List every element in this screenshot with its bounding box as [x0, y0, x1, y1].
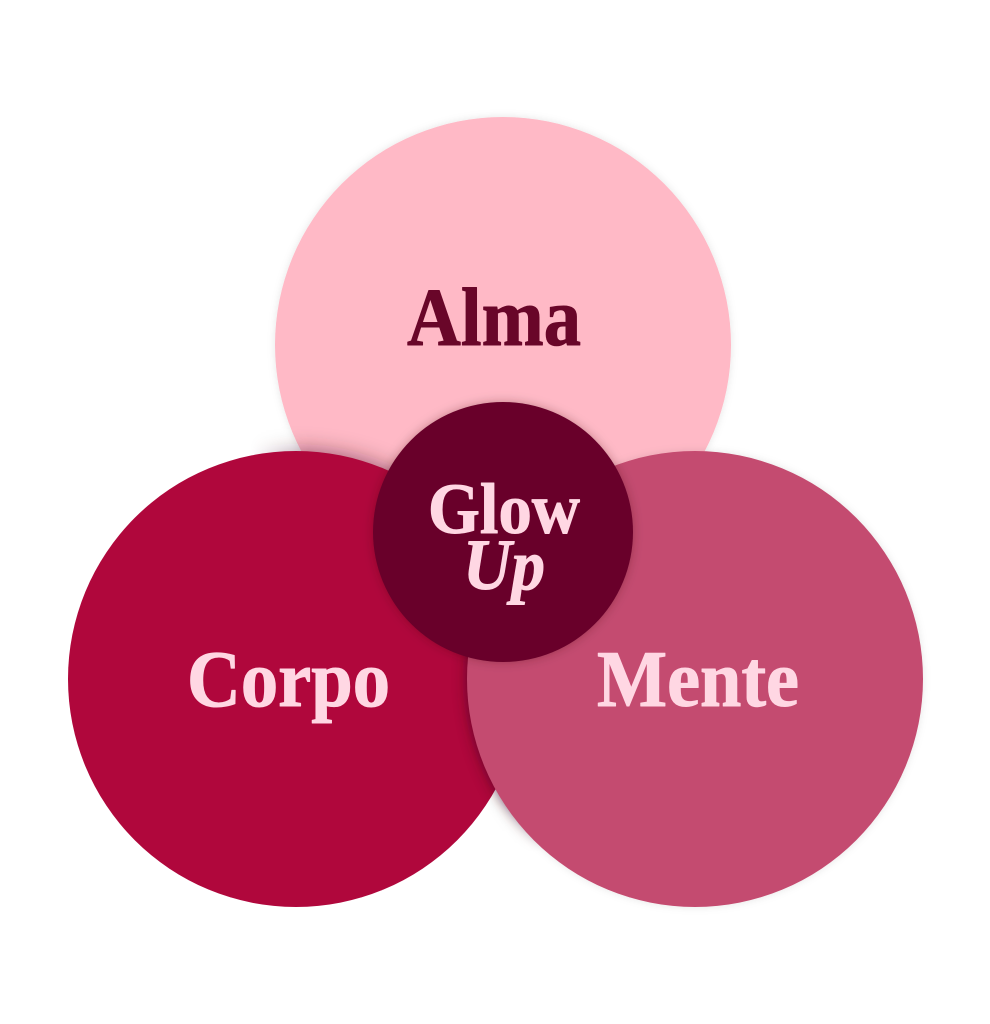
label: Glow: Glow	[428, 469, 580, 549]
diagram: Glow Up venn	[68, 116, 924, 908]
label: Alma: Alma	[407, 271, 581, 363]
label: Mente: Mente	[597, 636, 799, 724]
circle: Alma	[275, 117, 731, 573]
label: Up: Up	[463, 525, 545, 605]
circle: Mente	[467, 451, 923, 907]
circle: Glow Up center	[373, 402, 633, 662]
label: Corpo: Corpo	[187, 636, 390, 724]
circle: Corpo	[68, 451, 524, 907]
